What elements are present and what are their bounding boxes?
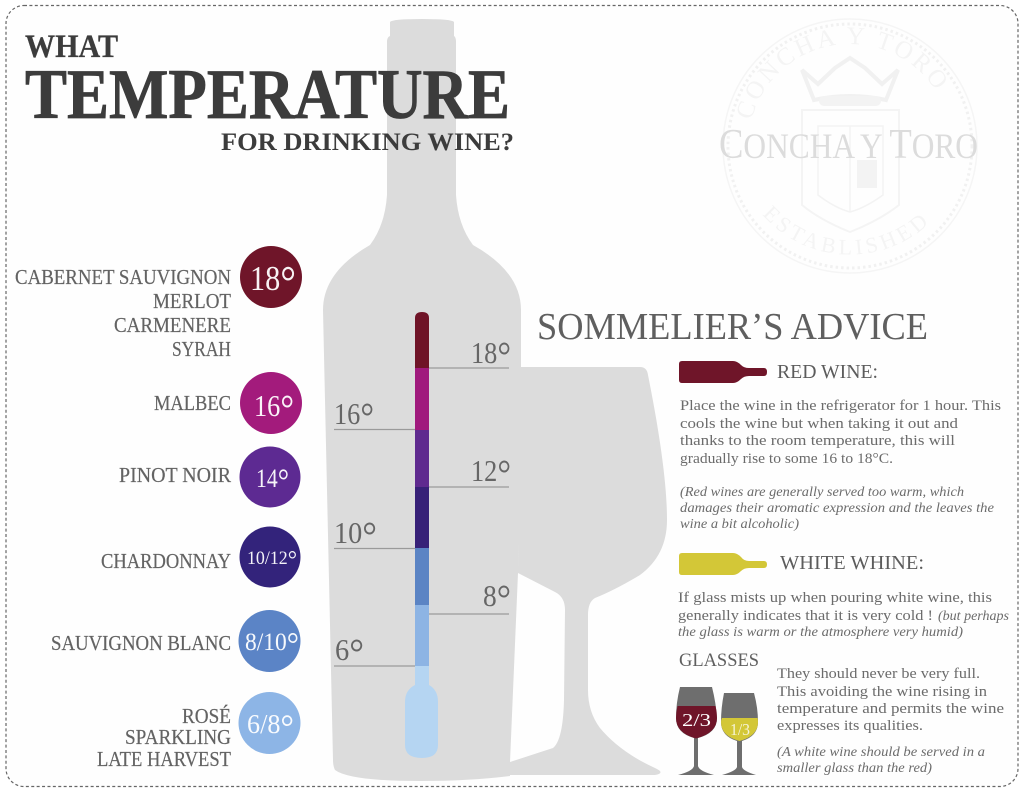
icon: white wine glass one third — [721, 693, 758, 775]
text: red wine advice: (Red wines are generally served too warm, which — [680, 484, 964, 499]
text: glasses advice: temperature and permits the wine — [777, 701, 1004, 717]
heading: Red wine: RED WINE: — [777, 361, 878, 383]
watermark: Concha y Toro seal — [719, 18, 978, 274]
variety: Rose, Sparkling, Late Harvest 6/8 degrees: LATE HARVEST — [97, 747, 231, 771]
text: red wine advice: thanks to the room temperature, this will — [680, 433, 955, 449]
icon: red wine bottle — [679, 361, 767, 383]
temperature scale labels: 16 — [334, 396, 365, 431]
variety: Sauvignon Blanc 8/10 degrees: 8/10 — [245, 629, 289, 656]
text: glasses advice: (A white wine should be served in a — [777, 744, 985, 759]
text: white wine advice: the glass is warm or the atmosphere very humid) — [678, 624, 964, 639]
text: red wine advice: Place the wine in the refrigerator for 1 hour. This — [680, 398, 1001, 414]
text: glasses advice: This avoiding the wine rising in — [777, 684, 988, 700]
variety: Malbec 16 degrees: MALBEC — [154, 391, 231, 415]
temperature scale labels: ° — [497, 576, 511, 621]
temperature scale labels: 12 — [471, 453, 502, 488]
text: white wine advice: (but perhaps — [938, 608, 1009, 623]
text: glasses advice: expresses its qualities. — [777, 718, 923, 734]
varieties at 18 degrees: SYRAH — [172, 337, 231, 361]
text: red wine advice: damages their aromatic expression and the leaves the — [680, 500, 994, 515]
varieties at 18 degrees: 18 — [250, 259, 285, 298]
variety: Rose, Sparkling, Late Harvest 6/8 degrees: ROSÉ — [182, 704, 231, 728]
variety: Malbec 16 degrees: ° — [280, 386, 294, 431]
watermark: Concha y Toro seal: CONCHA Y TORO — [719, 122, 978, 168]
title: WHAT — [25, 29, 118, 65]
variety: Pinot Noir 14 degrees: 14 — [256, 464, 282, 493]
variety: Rose, Sparkling, Late Harvest 6/8 degrees: 6/8 — [247, 709, 282, 739]
text: red wine advice: wine a bit alcoholic) — [680, 516, 800, 531]
variety: Sauvignon Blanc 8/10 degrees — [51, 610, 300, 672]
variety: Chardonnay 10/12 degrees: CHARDONNAY — [101, 549, 231, 573]
text: red wine advice: gradually rise to some 16 to 18°C. — [680, 451, 893, 467]
text: white wine advice: generally indicates that it is very cold ! — [678, 608, 933, 624]
variety: Pinot Noir 14 degrees: PINOT NOIR — [119, 463, 231, 487]
heading: Glasses: GLASSES — [679, 650, 759, 671]
wine bottle silhouette — [323, 19, 521, 781]
wine glass silhouette — [498, 367, 667, 775]
temperature scale labels — [334, 333, 511, 675]
heading: Sommelier's advice: SOMMELIER’S ADVICE — [537, 306, 928, 348]
icon: red wine glass two thirds — [676, 687, 717, 775]
text: glasses advice: They should never be very full. — [777, 666, 980, 682]
icon: white wine bottle — [679, 553, 767, 575]
variety: Rose, Sparkling, Late Harvest 6/8 degrees: SPARKLING — [125, 725, 231, 749]
text: red wine advice: cools the wine but when taking it out and — [680, 416, 959, 432]
heading: White whine: WHITE WHINE: — [780, 552, 924, 574]
watermark: Concha y Toro seal: CONCHA Y TORO — [738, 28, 946, 118]
variety: Sauvignon Blanc 8/10 degrees: ° — [287, 627, 299, 663]
varieties at 18 degrees — [15, 246, 302, 361]
temperature scale labels: ° — [360, 394, 374, 439]
variety: Pinot Noir 14 degrees — [119, 446, 300, 508]
text: glasses advice — [777, 666, 1004, 775]
varieties at 18 degrees: CARMENERE — [114, 313, 231, 337]
temperature scale labels: ° — [497, 451, 511, 496]
icon: red wine glass two thirds: 2/3 — [682, 710, 711, 730]
variety: Rose, Sparkling, Late Harvest 6/8 degrees — [97, 692, 300, 771]
varieties at 18 degrees: MERLOT — [153, 289, 231, 313]
temperature scale labels: 10 — [334, 515, 365, 550]
temperature scale labels: ° — [497, 333, 511, 378]
title: TEMPERATURE — [25, 56, 510, 134]
temperature scale labels: ° — [362, 513, 377, 558]
text: white wine advice — [678, 590, 1009, 639]
thermometer — [405, 312, 438, 758]
temperature scale labels: 6 — [335, 632, 350, 667]
variety: Malbec 16 degrees: 16 — [254, 388, 285, 423]
variety: Pinot Noir 14 degrees: ° — [278, 463, 289, 500]
text: glasses advice: smaller glass than the red) — [777, 760, 933, 775]
temperature scale labels: ° — [349, 630, 364, 675]
variety: Chardonnay 10/12 degrees — [101, 526, 300, 588]
text: red wine advice — [680, 398, 1001, 531]
text: white wine advice: If glass mists up when pouring white wine, this — [678, 590, 992, 606]
temperature scale labels: 18 — [471, 335, 502, 370]
temperature scale labels: 8 — [483, 578, 498, 613]
icon: white wine glass one third: 1/3 — [730, 720, 750, 739]
title: FOR DRINKING WINE? — [221, 129, 514, 156]
variety: Chardonnay 10/12 degrees: 10/12 — [247, 548, 290, 569]
title — [25, 29, 514, 156]
variety: Sauvignon Blanc 8/10 degrees: SAUVIGNON BLANC — [51, 631, 231, 655]
varieties at 18 degrees: ° — [280, 256, 296, 307]
varieties at 18 degrees: CABERNET SAUVIGNON — [15, 265, 231, 289]
variety: Chardonnay 10/12 degrees: ° — [288, 547, 297, 574]
variety: Malbec 16 degrees — [154, 372, 302, 434]
variety: Rose, Sparkling, Late Harvest 6/8 degrees: ° — [280, 707, 294, 746]
watermark: Concha y Toro seal: ESTABLISHED — [763, 205, 926, 254]
